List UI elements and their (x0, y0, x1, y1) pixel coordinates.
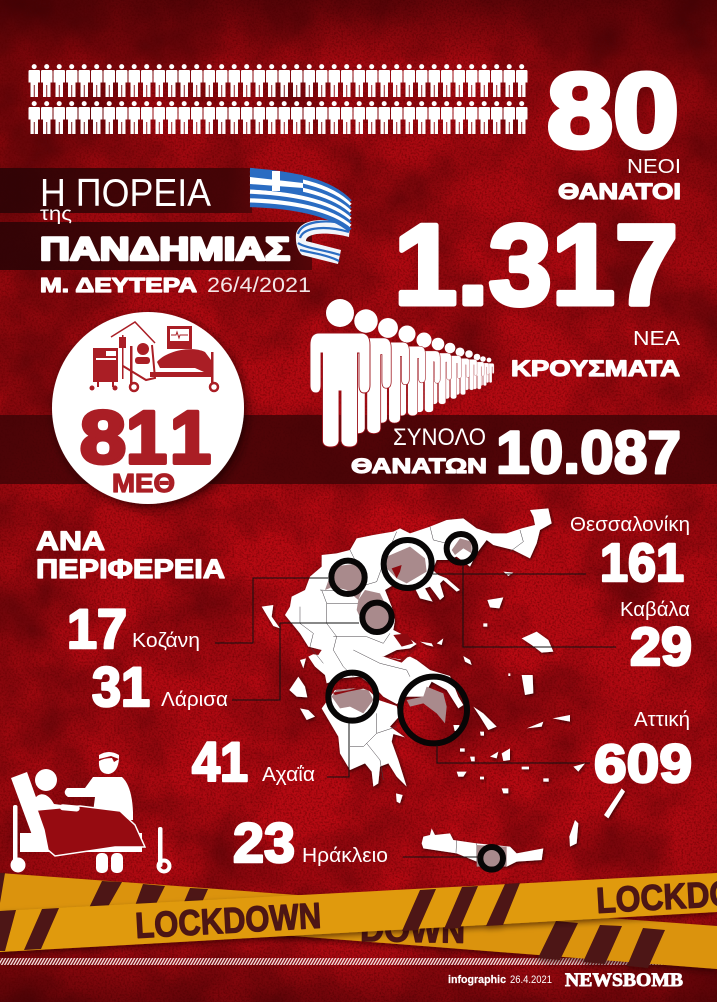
map markers (328, 534, 503, 870)
ICU count: 1 (126, 396, 167, 479)
ICU count: 1 (170, 396, 211, 479)
dark band: title bottom (0, 222, 312, 270)
region: Kozani: Κοζάνη (132, 630, 200, 652)
heading: by region: ΠΕΡΙΦΕΡΕΙΑ (36, 554, 225, 584)
region: Attica (594, 709, 692, 794)
stat: total deaths 10.087: 10.087 (496, 419, 681, 486)
title block: Μ. ΔΕΥΤΕΡΑ (40, 275, 197, 297)
ICU count: 8 (80, 396, 126, 479)
title block: ΠΑΝΔΗΜΙΑΣ (40, 231, 290, 267)
footer credit: infographic (448, 974, 506, 986)
stat: total deaths 10.087: ΣΥΝΟΛΟ (393, 424, 486, 451)
stat: 1.317 new cases: ΚΡΟΥΣΜΑΤΑ (511, 356, 680, 381)
stat: total deaths 10.087: ΘΑΝΑΤΩΝ (351, 455, 487, 478)
region: Attica: 609 (594, 734, 692, 794)
region: Achaia (192, 730, 315, 793)
region: Kavala: 29 (630, 617, 692, 677)
region: Heraklion: Ηράκλειο (302, 845, 388, 867)
stat: 1.317 new cases: ΝΕΑ (633, 328, 681, 350)
region: Kozani (67, 597, 200, 660)
footer credit: 26.4.2021 (510, 974, 552, 986)
stat: 80 new deaths: ΘΑΝΑΤΟΙ (558, 179, 681, 204)
pictogram: queue of people (310, 299, 494, 447)
title block (40, 172, 311, 297)
region: Kozani: 17 (67, 597, 127, 660)
panel: ICU circle (52, 312, 244, 504)
map land (262, 508, 625, 867)
region: Thessaloniki: Θεσσαλονίκη (570, 514, 690, 536)
region: Larisa (92, 655, 228, 718)
region: Achaia: Αχαΐα (262, 764, 315, 786)
icon: doctor and patient (10, 752, 170, 873)
region: Heraklion: 23 (233, 811, 295, 874)
region: Achaia: 41 (192, 730, 248, 793)
stat: 80 new deaths (547, 52, 681, 204)
region: Larisa: Λάρισα (161, 689, 228, 711)
lockdown tape: back: DOWN (360, 908, 466, 951)
stat: 80 new deaths: ΝΕΟΙ (627, 156, 681, 178)
footer credit: NEWSBOMB (565, 970, 683, 991)
icon: ICU bed and machines (90, 322, 218, 391)
icon: Greek flag ribbon (250, 168, 350, 264)
map regional borders (300, 527, 523, 862)
stat: 1.317 new cases: 1.317 (394, 202, 678, 329)
lockdown tape: back (0, 873, 717, 969)
stat: 80 new deaths: 80 (547, 52, 679, 170)
leader lines (215, 565, 616, 857)
map dark inlets (333, 565, 402, 695)
title block: 26/4/2021 (207, 274, 311, 297)
dark band: title top (0, 168, 252, 213)
hatched divider (0, 958, 717, 965)
region: Heraklion (233, 811, 388, 874)
region: Larisa: 31 (92, 655, 150, 718)
lockdown tape: front: LOCKDOWN (134, 895, 322, 946)
stat: total deaths 10.087 (351, 419, 681, 486)
region: Thessaloniki: 161 (600, 533, 684, 593)
region: Thessaloniki (570, 514, 690, 593)
pictogram: 80 deaths, two rows of 40 people (28, 64, 528, 135)
title block: Η ΠΟΡΕΙΑ (40, 172, 211, 215)
region: Kavala: Καβάλα (620, 599, 690, 621)
panel: ICU circle: ΜΕΘ (112, 468, 175, 498)
heading: by region: ΑΝΑ (36, 526, 105, 556)
footer credit (448, 970, 683, 991)
region: Attica: Αττική (634, 709, 690, 731)
lockdown tape: front (0, 872, 717, 952)
heading: by region (36, 526, 225, 584)
map of Greece (262, 508, 625, 870)
dark band: totals (0, 415, 717, 484)
ICU count (80, 396, 211, 479)
title block: της (40, 204, 72, 225)
region: Kavala (620, 599, 692, 677)
map sea cut-outs (308, 633, 425, 722)
map highlighted regions (325, 538, 507, 867)
